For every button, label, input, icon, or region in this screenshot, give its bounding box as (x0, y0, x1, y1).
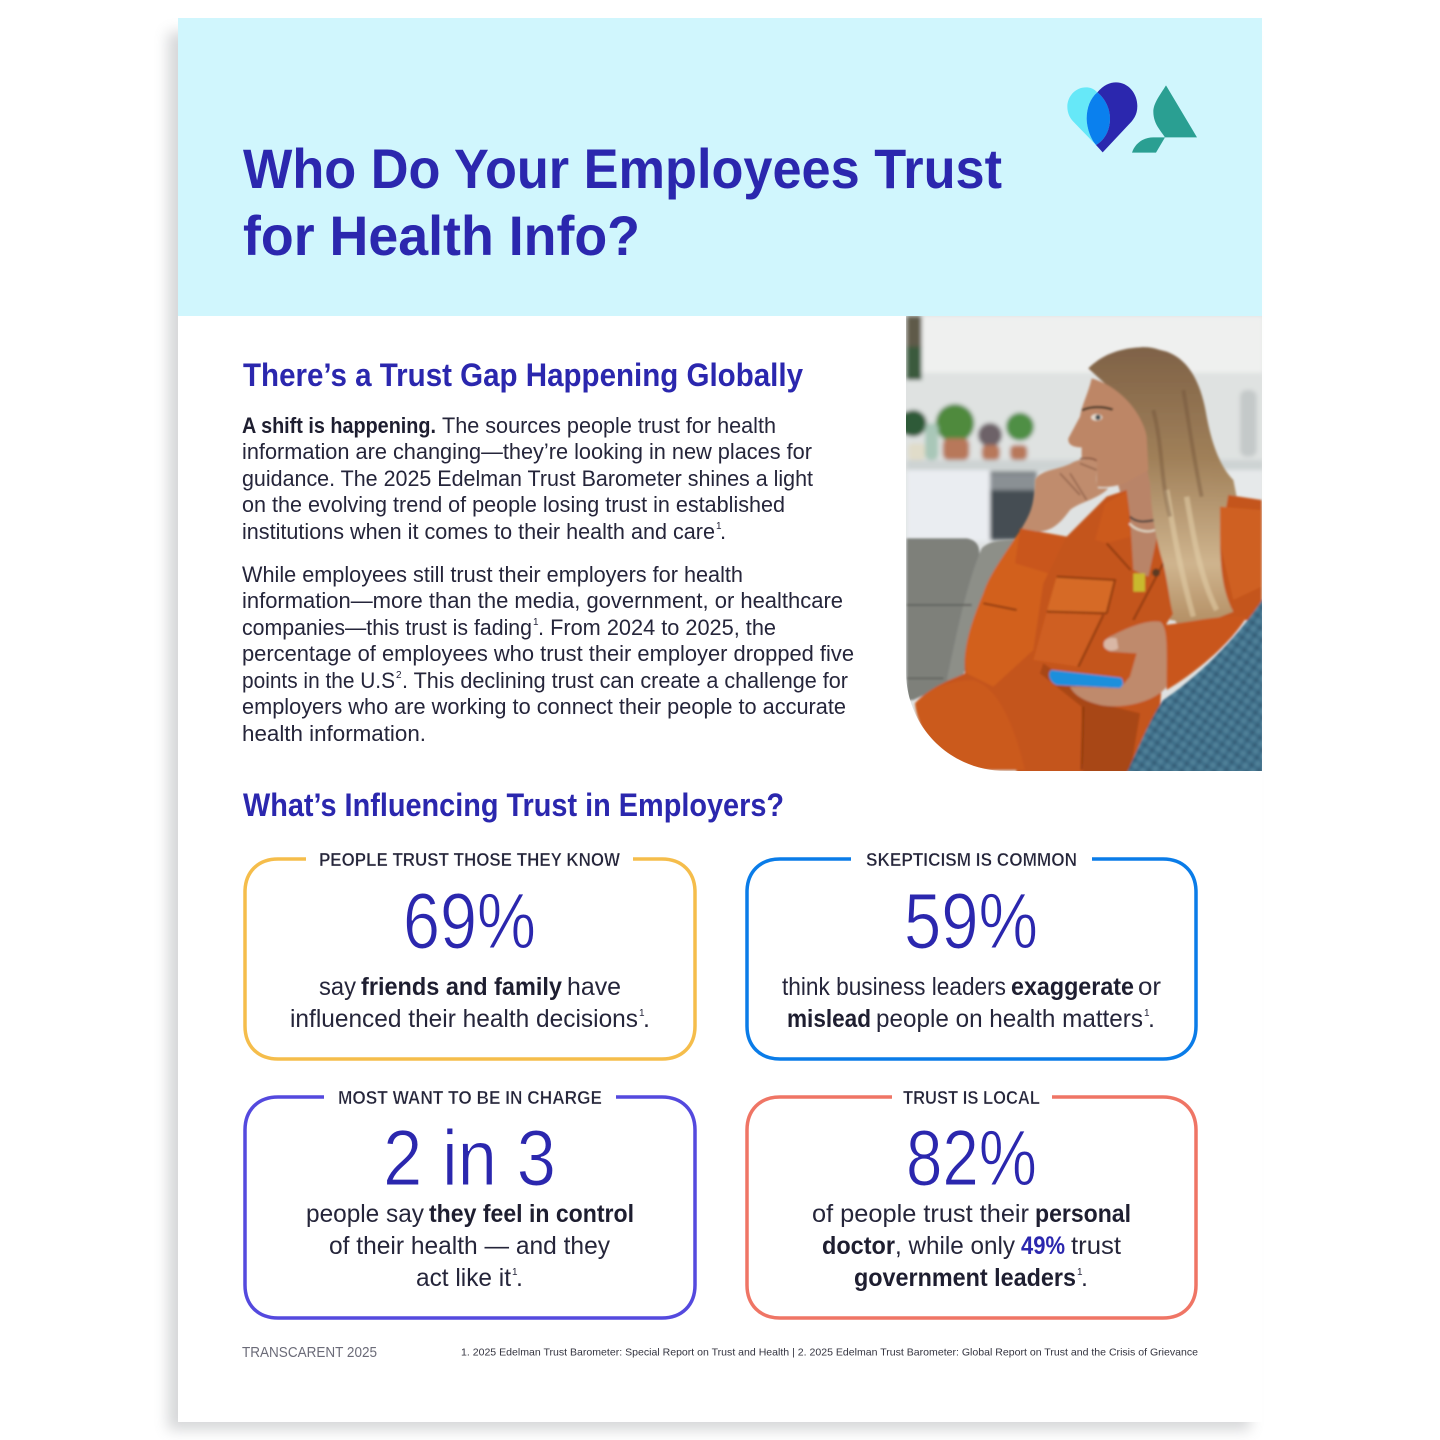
panel: people trust those they know: have (567, 973, 621, 1001)
panel: skepticism is common: mislead (787, 1005, 871, 1033)
panel: most want to be in charge: 1 (512, 1267, 518, 1278)
photo: woman on a sofa holding a phone (900, 316, 1263, 773)
panel: people trust those they know: friends and family (361, 973, 562, 1001)
sleeve (1165, 616, 1247, 690)
panel: most want to be in charge: . (516, 1264, 523, 1292)
face (1068, 378, 1148, 487)
paragraph: a shift is happening (242, 413, 813, 544)
paragraph: a shift is happening: The sources people trust for health (442, 413, 776, 438)
panel: most want to be in charge: MOST WANT TO BE IN CHARGE (338, 1088, 602, 1108)
footer: brand and year: TRANSCARENT 2025 (242, 1345, 377, 1361)
paragraph: employer trust is fading: . From 2024 to 2025, the (538, 615, 776, 640)
panel: people trust those they know: 69% (403, 876, 536, 965)
title: Who Do Your Employees Trust (243, 137, 1002, 200)
cuff (1017, 528, 1063, 572)
panel: skepticism is common: think business leaders (782, 973, 1006, 1001)
jacket body (915, 490, 1262, 773)
paragraph: employer trust is fading: While employees still trust their employers for health (242, 562, 743, 587)
panel: people trust those they know: PEOPLE TRUST THOSE THEY KNOW (319, 850, 620, 870)
footer: references: 1. 2025 Edelman Trust Barometer: Special Report on Trust and Health | 2. 2025 Edelman Trust Barometer: Global Report on Trust and the Crisis of Grievance (461, 1346, 1198, 1358)
paragraph: a shift is happening: information are changing—they’re looking in new places for (242, 439, 812, 464)
blanket (1127, 598, 1263, 773)
panel: most want to be in charge (245, 1088, 695, 1318)
panel: trust is local: TRUST IS LOCAL (903, 1088, 1040, 1108)
heading: influencing trust: What’s Influencing Trust in Employers? (243, 787, 784, 823)
panel: skepticism is common: 59% (904, 876, 1038, 965)
paragraph: employer trust is fading: points in the U.S (242, 668, 395, 693)
panel: skepticism is common: 1 (1144, 1008, 1150, 1019)
paragraph: employer trust is fading: information—more than the media, government, or healthcare (242, 588, 843, 613)
paragraph: employer trust is fading: employers who are working to connect their people to accurate (242, 694, 846, 719)
heading: trust gap: There’s a Trust Gap Happening Globally (243, 357, 803, 393)
panel: people trust those they know (245, 850, 695, 1059)
panel: trust is local: . (1081, 1264, 1088, 1292)
paragraph: a shift is happening: on the evolving trend of people losing trust in established (242, 492, 785, 517)
paragraph: a shift is happening: . (720, 519, 726, 544)
panel: skepticism is common: exaggerate (1011, 973, 1134, 1001)
panel: trust is local: 49% (1021, 1232, 1065, 1260)
panel: trust is local: doctor (822, 1232, 895, 1260)
hair back (1088, 348, 1237, 625)
panel: people trust those they know: influenced their health decisions (290, 1005, 638, 1033)
title (243, 137, 1002, 267)
header band (178, 18, 1262, 316)
panel: skepticism is common: people on health matters (876, 1005, 1143, 1033)
panel: trust is local: personal (1035, 1200, 1131, 1228)
icon: logo (1067, 82, 1197, 153)
paragraph: employer trust is fading: 1 (533, 617, 539, 628)
paragraph: employer trust is fading: 2 (396, 670, 402, 681)
paragraph: employer trust is fading: percentage of employees who trust their employer dropped five (242, 641, 854, 666)
necklace (1130, 517, 1155, 521)
sofa (907, 538, 979, 700)
paragraph: a shift is happening: institutions when it comes to their health and care (242, 519, 715, 544)
neck and chest (1117, 472, 1158, 578)
panel: trust is local: trust (1071, 1232, 1121, 1260)
paragraph: a shift is happening: guidance. The 2025 Edelman Trust Barometer shines a light (242, 466, 813, 491)
panel: trust is local: 82% (906, 1113, 1037, 1202)
panel: most want to be in charge: people say (306, 1200, 424, 1228)
paragraph: a shift is happening: 1 (716, 521, 722, 532)
panel: people trust those they know: . (643, 1005, 650, 1033)
panel: skepticism is common (747, 850, 1196, 1059)
paragraph: employer trust is fading (242, 562, 854, 746)
hand on chin (1022, 459, 1108, 532)
panel: skepticism is common: SKEPTICISM IS COMMON (866, 850, 1077, 870)
panel: trust is local (747, 1088, 1196, 1318)
panel: trust is local: , while only (895, 1232, 1015, 1260)
page shadow (168, 32, 1250, 1430)
paragraph: employer trust is fading: companies—this trust is fading (242, 615, 532, 640)
panel: most want to be in charge: act like it (416, 1264, 511, 1292)
paragraph: employer trust is fading: health information. (242, 721, 426, 746)
panel: people trust those they know: say (319, 973, 356, 1001)
paragraph: employer trust is fading: . This declining trust can create a challenge for (402, 668, 848, 693)
panel: people trust those they know: 1 (639, 1008, 645, 1019)
panel: skepticism is common: . (1148, 1005, 1155, 1033)
front hair (1088, 347, 1233, 625)
panel: trust is local: 1 (1077, 1267, 1083, 1278)
paragraph: a shift is happening: A shift is happening. (242, 413, 436, 438)
panel: skepticism is common: or (1138, 973, 1161, 1001)
panel: most want to be in charge: 2 in 3 (383, 1113, 556, 1202)
page sheet (178, 18, 1262, 1422)
panel: trust is local: of people trust their (812, 1200, 1029, 1228)
panel: most want to be in charge: of their health — and they (329, 1232, 610, 1260)
holding hand (1070, 621, 1167, 706)
title: for Health Info? (243, 204, 640, 267)
panel: trust is local: government leaders (854, 1264, 1076, 1292)
panel: most want to be in charge: they feel in control (429, 1200, 634, 1228)
phone (1049, 670, 1123, 688)
